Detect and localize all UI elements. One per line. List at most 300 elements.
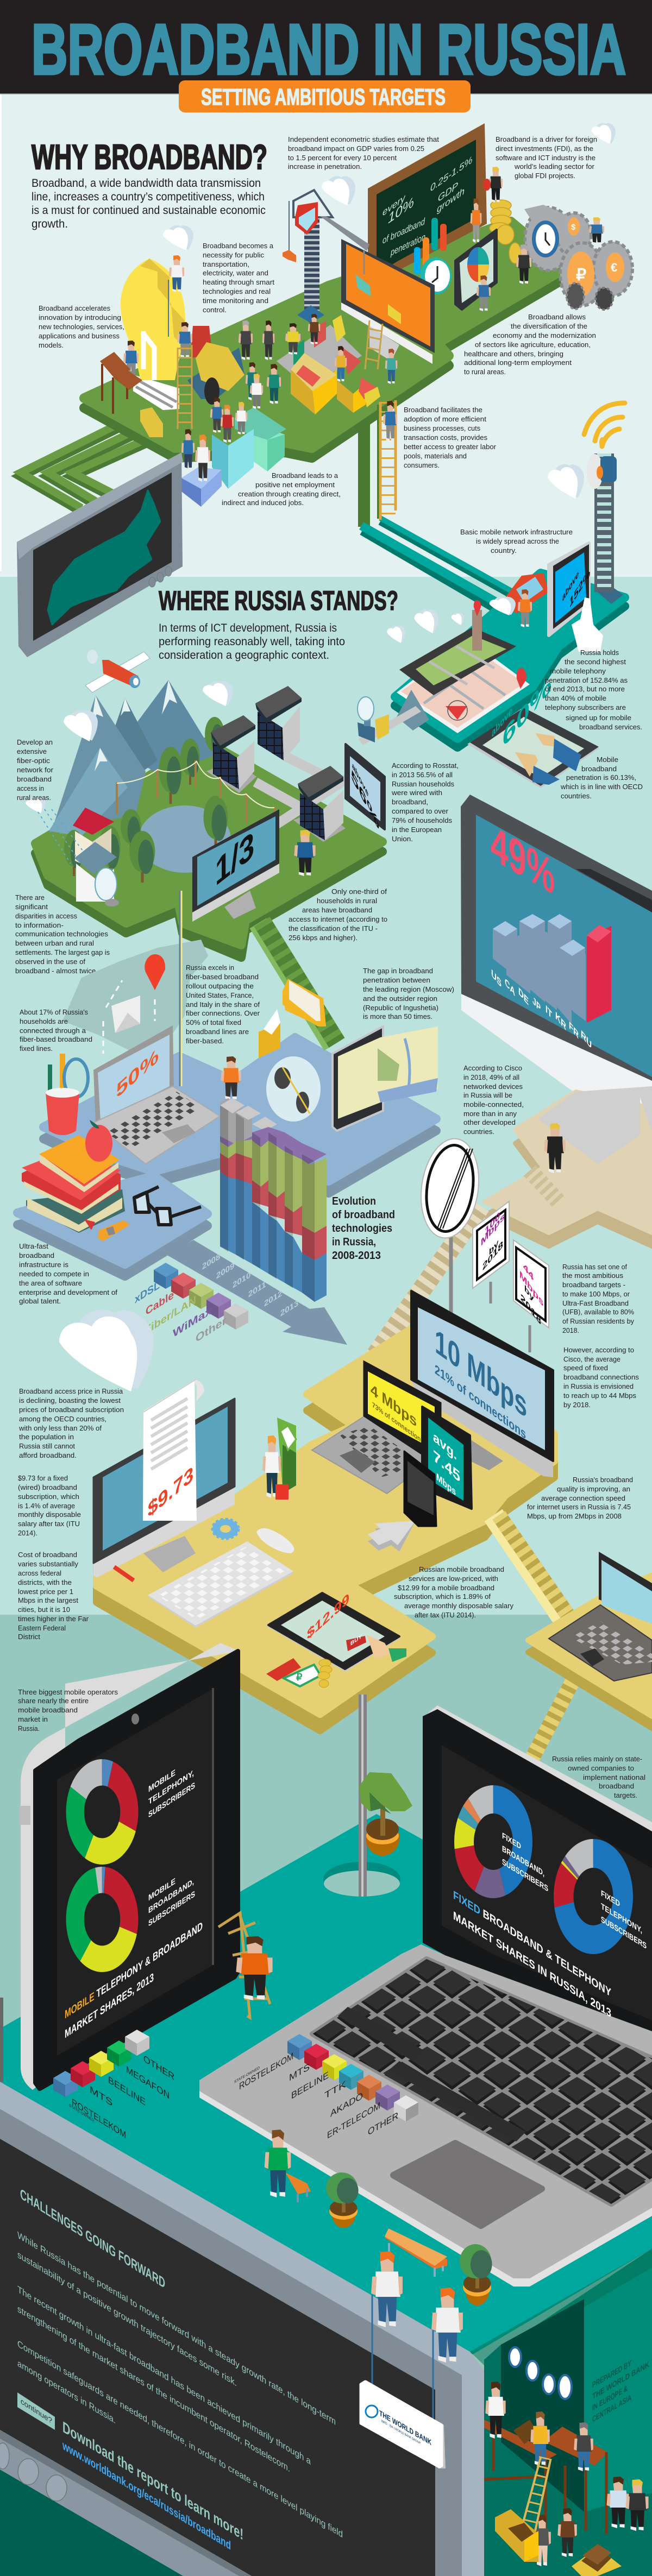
text block: FDI: global FDI projects.	[515, 172, 575, 180]
icon: world bank sign: IBRD · IDA | WORLD BANK GROUP	[381, 2419, 421, 2445]
text block: $9.73 fixed	[18, 1474, 81, 1537]
text block: $9.73 fixed: subscription, which	[18, 1492, 79, 1501]
text: prepared by: IN EUROPE &	[592, 2383, 628, 2413]
text block: mobile broadband penetration: broadband	[581, 765, 617, 773]
icon: monitor with receipt: $9.73	[148, 1462, 193, 1523]
text block: ultra-fast: the area of software	[19, 1279, 82, 1287]
chart: mobile telephony donut	[75, 1772, 129, 1851]
labels: mobile donuts: MOBILE	[148, 1768, 175, 1794]
text block: basic mobile network	[460, 528, 573, 555]
panel: right yellow platform	[528, 1575, 652, 1728]
icon: clock	[420, 257, 452, 294]
text block: broadband quality	[527, 1476, 633, 1520]
intro text: why broadband	[32, 177, 266, 230]
labels: mobile donuts: SUBSCRIBERS	[148, 1889, 195, 1929]
text block: FDI: software and ICT industry is the	[496, 154, 595, 162]
icon: tablet $12.99	[268, 1589, 406, 1672]
person: blond man village	[294, 830, 316, 876]
chart: fixed telephony donut	[563, 1853, 623, 1940]
text block: fiber rollout: Russia excels in	[186, 963, 234, 972]
chart: fixed broadband donut	[464, 1799, 523, 1884]
panel: lake and roads	[139, 706, 421, 873]
icon: blackboard: 0.25-1.5%	[430, 154, 473, 194]
icon: monitor 10 Mbps: 21% of connections	[435, 1362, 526, 1442]
icon: phone with 152 percent: 152%	[569, 565, 590, 611]
chart title: evolution	[332, 1195, 395, 1262]
text block: broadband quality: average connection speed	[541, 1494, 625, 1502]
icon: orange building	[255, 686, 302, 760]
text block: ultra-fast: enterprise and development of	[19, 1288, 117, 1296]
intro text: why broadband: is a must for continued and sustainable economic	[32, 204, 266, 217]
text block: public transportation: electricity, water and	[203, 269, 268, 277]
text block: disparities: There are	[15, 893, 45, 902]
text block: mobile broadband penetration: penetration is 60.13%,	[566, 773, 636, 782]
text block: low-priced mobile: average monthly disposable salary	[404, 1602, 513, 1610]
panel: teal mobile platform	[395, 573, 625, 747]
icon: right laptop	[549, 1552, 652, 1681]
labels: mobile donuts: MOBILE	[148, 1876, 175, 1903]
text block: ambitious targets: 2018.	[562, 1326, 579, 1334]
icon: clouds village	[64, 681, 233, 741]
chart: broadband technology timeline years: 2013	[280, 1298, 298, 1319]
icon: big monitor 49 percent: 49%	[491, 814, 555, 906]
icon: big monitor 49 percent: FR	[569, 1019, 579, 1041]
text block: rosstat: Union.	[392, 835, 413, 843]
icon: blackboard: 10%	[388, 194, 414, 226]
text block: efficient processes: better access to greater labor	[404, 443, 497, 451]
text block: ultra-fast: infrastructure is	[19, 1261, 68, 1269]
text block: cost varies: Mbps in the largest	[18, 1596, 78, 1604]
panel: black tablet left	[0, 1643, 239, 2090]
chart: broadband technology timeline years: 2010	[233, 1270, 250, 1290]
text block: fiber rollout: fiber-based.	[186, 1037, 224, 1045]
icon: cell tower	[587, 454, 623, 604]
icon: big monitor 49 percent: JP	[532, 994, 541, 1015]
icon: coins and gears	[490, 200, 632, 310]
icon: phone with 152 percent: above	[562, 568, 579, 604]
text block: broadband quality: for internet users in Russia is 7.45	[527, 1503, 631, 1511]
text block: ambitious targets: Ultra-Fast Broadband	[562, 1299, 629, 1307]
text block: regional gap: (Republic of Ingushetia)	[363, 1004, 438, 1012]
chart: evolution of broadband technologies columns	[220, 1098, 327, 1302]
subtitle pill: SETTING AMBITIOUS TARGETS	[201, 84, 446, 110]
chart: broadband technology timeline years	[202, 1251, 298, 1319]
text block: rosstat: compared to over	[392, 807, 449, 815]
text block: cost varies: District	[18, 1633, 40, 1641]
text block: ultra-fast: broadband	[19, 1251, 54, 1259]
icon: houses	[73, 808, 117, 902]
text block: regional gap	[363, 967, 454, 1021]
icon: blackboard: every	[383, 192, 406, 218]
text block: cisco networked devices: networked devices	[463, 1082, 523, 1091]
text block: price declining	[18, 1387, 124, 1459]
icon: pensioners	[371, 2251, 463, 2363]
icon: blackboard: GDP	[438, 180, 458, 204]
text: challenges paragraphs: strengthening of the market shares of the incumbent operator, Rostelecom.	[17, 2303, 290, 2474]
icon: timeline arrow	[166, 1240, 347, 1345]
icon: tablet with russia map	[17, 452, 183, 657]
pipes: green to teal connector	[361, 405, 516, 611]
text block: mobile telephony penetration	[545, 648, 642, 731]
text block: ultra-fast	[19, 1242, 117, 1305]
icon: tablet 56 percent: 56%	[351, 765, 379, 834]
text block: price declining: the population in	[19, 1433, 74, 1441]
icon: big monitor 49 percent: CA	[505, 975, 515, 998]
text block: disparities: between urban and rural	[15, 939, 94, 947]
text block: state-owned companies	[552, 1755, 645, 1799]
text block: operators share: share nearly the entire	[18, 1697, 89, 1705]
text block: mobile telephony penetration: telephony subscribers are	[545, 703, 626, 711]
text block: diversification: of sectors like agriculture, education,	[475, 341, 591, 349]
chart: broadband technology timeline years: 2011	[248, 1280, 266, 1300]
text block: price declining: afford broadband.	[19, 1451, 77, 1459]
text block: mobile telephony penetration: Russia holds	[580, 648, 619, 657]
text: prepared by: PREPARED BY	[592, 2358, 631, 2390]
text block: cisco speed: broadband connections	[563, 1373, 640, 1381]
labels: fixed donuts: TELEPHONY,	[601, 1901, 642, 1935]
text block: cost varies: cities, but it is 10	[18, 1605, 70, 1614]
icon: desks and team	[484, 2382, 649, 2566]
icon: cloud with gears	[266, 1056, 321, 1122]
text block: ultra-fast: global talent.	[19, 1297, 61, 1305]
text block: FDI: world's leading sector for	[514, 162, 595, 171]
icon: floor hole with pole	[323, 1695, 400, 1897]
icon: tablet with 60 percent: 60%	[503, 667, 551, 754]
icon: red car	[503, 573, 549, 627]
text block: mobile broadband penetration	[560, 755, 643, 800]
text block: price declining: is declining, boasting the lowest	[19, 1396, 121, 1404]
chart: broadband technology timeline years: 2008	[202, 1251, 220, 1272]
labels: mobile donuts: SUBSCRIBERS	[148, 1780, 195, 1820]
legend: mobile market operators: OTHER	[143, 2052, 174, 2082]
icon: coins and gears: $	[571, 223, 576, 232]
panel: challenges tablet frame	[0, 2082, 484, 2576]
icon: palm tree	[359, 1772, 412, 1856]
icon: clouds mobile platform	[387, 596, 516, 643]
icon: beige stairs	[374, 1206, 481, 1358]
labels: fixed donuts	[502, 1831, 647, 1951]
labels: fixed donuts: FIXED	[601, 1888, 620, 1909]
text block: disparities	[15, 893, 110, 975]
text block: cisco networked devices: mobile-connected,	[463, 1100, 524, 1109]
text block: ambitious targets: the most ambitious	[562, 1271, 624, 1280]
icon: tablet avg speed: avg.	[433, 1428, 457, 1464]
text block: cisco speed: speed of fixed	[563, 1364, 608, 1372]
icon: tablet avg speed	[422, 1407, 472, 1509]
callout: continue	[17, 2392, 55, 2430]
icon: wall clocks	[509, 2347, 572, 2399]
text block: low-priced mobile: after tax (ITU 2014).	[415, 1611, 476, 1619]
icon: sign 44 Mbps: by	[524, 1283, 534, 1305]
icon: potted plant two	[460, 2244, 492, 2306]
intro text: why broadband: Broadband, a wide bandwidth data transmission	[32, 177, 261, 190]
text block: public transportation	[203, 242, 274, 314]
text block: rosstat: broadband,	[392, 798, 428, 806]
icon: big monitor 49 percent: US	[491, 967, 501, 990]
icon: construction crane	[283, 190, 369, 323]
text: prepared by: CENTRAL ASIA	[592, 2392, 631, 2424]
text block: cisco speed: However, according to	[563, 1346, 634, 1354]
person: orange shirt person	[221, 1056, 241, 1100]
text block: mobile telephony penetration: penetration of 152.84% as	[545, 676, 628, 684]
icon: sign 100 Mbps: Mbps	[481, 1210, 505, 1249]
icon: tablet avg speed: 7.45	[433, 1446, 460, 1486]
text block: fiber-optic network: rural areas.	[17, 793, 51, 802]
icon: satellite	[85, 650, 150, 692]
icon: books and apple	[22, 1120, 125, 1233]
intro text: where russia stands: performing reasonably well, taking into	[159, 635, 345, 648]
text block: $9.73 fixed: is 1.4% of average	[18, 1502, 75, 1510]
text block: innovation: new technologies, services,	[39, 323, 124, 331]
icon: light bulb	[121, 259, 185, 437]
text block: employment: Broadband leads to a	[272, 471, 338, 480]
title: mobile market shares: MOBILE TELEPHONY & BROADBAND	[65, 1919, 203, 2021]
text block: econometric studies: broadband impact on GDP varies from 0.25	[288, 144, 424, 153]
text block: $9.73 fixed: $9.73 for a fixed	[18, 1474, 68, 1482]
icon: sign 44 Mbps: 44	[523, 1259, 534, 1283]
text block: mobile telephony penetration: of end 2013, but no more	[545, 685, 625, 693]
text block: mobile broadband penetration: which is in line with OECD	[560, 783, 643, 791]
icon: paper plane	[103, 980, 155, 1054]
text block: efficient processes: consumers.	[404, 461, 440, 469]
legend: mobile market operators: BEELINE	[108, 2074, 146, 2108]
icon: world map ghost	[62, 940, 208, 1051]
text block: price declining: with only less than 20% of	[18, 1424, 102, 1432]
text block: diversification: to rural areas.	[464, 368, 506, 376]
chart title: evolution: in Russia,	[332, 1236, 376, 1248]
heading: where russia stands: WHERE RUSSIA STANDS?	[159, 585, 398, 616]
text block: rosstat: in 2013 56.5% of all	[392, 771, 453, 779]
text block: FDI: Broadband is a driver for foreign	[496, 135, 597, 143]
text block: cisco networked devices	[463, 1064, 524, 1136]
icon: monitor	[341, 239, 435, 364]
text block: innovation: innovation by introducing	[39, 313, 121, 322]
panel: beige platform	[485, 1092, 652, 1246]
text block: ambitious targets	[562, 1263, 634, 1334]
legend: technologies cubes: xDSL	[135, 1278, 160, 1306]
text: challenges paragraphs	[17, 2229, 343, 2540]
icon: usb stick	[98, 1220, 130, 1241]
text block: fiber rollout: United States, France,	[186, 991, 254, 999]
icon: utility poles	[117, 760, 274, 836]
text block: operators share: Russia.	[18, 1724, 40, 1733]
icon: monitor 10 Mbps: 10 Mbps	[435, 1321, 527, 1426]
text block: employment: indirect and induced jobs.	[222, 499, 304, 507]
text block: operators share	[18, 1688, 118, 1733]
legend: technologies cubes: Cable	[146, 1288, 174, 1318]
icon: monitor one third	[192, 809, 279, 922]
text block: mobile telephony penetration: mobile telephony	[550, 667, 606, 675]
icon: laptop 4 Mbps: 73% of connections	[372, 1401, 424, 1446]
text block: diversification: the diversification of the	[511, 322, 587, 330]
text block: diversification: economy and the modernization	[493, 331, 596, 339]
panel: green pipes	[21, 415, 163, 512]
text block: 17 percent households: About 17% of Russia's	[20, 1008, 88, 1016]
text block: efficient processes: pools, materials and	[404, 452, 467, 460]
labels: fixed donuts: SUBSCRIBERS	[502, 1857, 548, 1894]
text block: ambitious targets: Russia has set one of	[562, 1263, 627, 1271]
chart title: evolution: Evolution	[332, 1195, 376, 1207]
text block: 17 percent households	[20, 1008, 92, 1053]
text block: fiber rollout: broadband lines are	[186, 1028, 249, 1036]
icon: trees	[64, 717, 228, 883]
text block: innovation: applications and business	[39, 332, 120, 340]
icon: world bank sign	[361, 2295, 446, 2468]
legend: mobile market operators: STATE-OWNED	[69, 2103, 94, 2123]
icon: mouse	[256, 1528, 294, 1553]
text block: econometric studies: increase in penetration.	[288, 162, 362, 171]
text block: efficient processes: transaction costs, provides	[404, 433, 487, 442]
text block: state-owned companies: broadband	[599, 1782, 634, 1790]
text: challenges paragraphs: sustainability of a positive growth trajectory faces some risk.	[17, 2249, 237, 2389]
text: prepared by	[592, 2358, 649, 2424]
icon: stand and seated person	[530, 1086, 652, 1203]
text block: cost varies: Cost of broadband	[18, 1551, 77, 1559]
text block: fiber rollout: and Italy in the share of	[186, 1000, 260, 1009]
text block: regional gap: and the outsider region	[363, 994, 437, 1003]
icon: dish village	[95, 868, 119, 906]
text block: cisco speed: Cisco, the average	[563, 1355, 620, 1363]
icon: coins and gears: ₽	[576, 266, 586, 284]
text block: efficient processes: Broadband facilitates the	[404, 406, 482, 414]
text block: ambitious targets: of Russian residents by	[562, 1317, 634, 1325]
text block: rosstat: were wired with	[391, 789, 442, 797]
text block: disparities: to information-	[15, 921, 64, 929]
text block: low-priced mobile: services are low-priced, with	[409, 1574, 498, 1583]
text block: state-owned companies: implement national	[583, 1773, 645, 1781]
chart title: evolution: of broadband	[332, 1209, 395, 1221]
text block: ultra-fast: needed to compete in	[19, 1270, 89, 1278]
text block: state-owned companies: owned companies to	[568, 1764, 634, 1772]
text block: employment	[222, 471, 341, 507]
labels: mobile donuts	[148, 1768, 195, 1929]
text block: price declining: Russia still cannot	[19, 1442, 75, 1450]
icon: world bank sign: THE WORLD BANK	[379, 2409, 431, 2447]
icon: yellow building	[293, 766, 346, 842]
icon: red map pin	[145, 954, 165, 990]
icon: blackboard	[368, 123, 487, 291]
text block: mobile telephony penetration: the second highest	[565, 658, 626, 666]
legend: technologies cubes: WiMax	[173, 1303, 212, 1340]
text block: low-priced mobile: subscription, which is 1.89% of	[394, 1592, 491, 1601]
icon: wifi arcs	[584, 403, 625, 448]
legend: fixed market operators: TTK	[324, 2078, 347, 2101]
icon: card money and coins: ₽	[296, 1672, 303, 1683]
text block: cisco networked devices: countries.	[463, 1128, 494, 1136]
icon: dish truck	[358, 697, 389, 742]
legend: fixed market operators	[234, 2034, 418, 2141]
text block: efficient processes: adoption of more efficient	[404, 415, 486, 423]
text block: state-owned companies: targets.	[614, 1791, 637, 1799]
text block: cost varies: across federal	[18, 1569, 61, 1577]
icon: big cloud	[59, 1309, 154, 1391]
text block: public transportation: technologies and real	[203, 287, 271, 295]
legend: fixed market operators: MTS	[289, 2061, 310, 2083]
text block: cost varies: Eastern Federal	[18, 1624, 66, 1632]
icon: monitor with receipt	[93, 1380, 235, 1578]
icon: big monitor 49 percent	[461, 795, 652, 1138]
pole: vertical cable	[180, 891, 181, 1086]
text block: disparities: significant	[15, 903, 48, 911]
text block: ambitious targets: broadband targets -	[562, 1281, 625, 1289]
text block: ultra-fast: Ultra-fast	[19, 1242, 48, 1250]
text block: public transportation: necessity for public	[203, 251, 264, 259]
icon: tablet 56 percent: above	[352, 760, 368, 799]
text block: basic mobile network: country.	[491, 546, 517, 555]
text block: innovation	[39, 304, 124, 349]
icon: green stairs	[258, 922, 337, 1045]
text block: efficient processes: business processes, cuts	[404, 424, 480, 432]
icon: laptop 4 Mbps: 4 Mbps	[371, 1380, 417, 1431]
text block: broadband quality: quality is improving, an	[557, 1485, 630, 1493]
text block: $9.73 fixed: monthly disposable	[18, 1510, 81, 1519]
text: challenges paragraphs: The recent growth in ultra-fast broadband has been achieved primarily through a	[17, 2283, 311, 2467]
icon: blackboard: growth	[437, 186, 465, 215]
icon: rain cloud	[26, 797, 84, 864]
chart title: evolution: 2008-2013	[332, 1250, 381, 1262]
text block: $9.73 fixed: salary after tax (ITU	[18, 1520, 80, 1528]
icon: folder	[283, 979, 326, 1026]
panel: black tablet right	[423, 1705, 652, 2031]
chart title: evolution: technologies	[332, 1223, 392, 1235]
icon: mountains	[49, 680, 215, 836]
icon: blackboard: penetration	[390, 231, 425, 258]
text block: FDI: direct investments (FDI), as the	[496, 144, 593, 153]
text block: fiber-optic network: network for	[17, 766, 54, 774]
text block: efficient processes	[404, 406, 497, 469]
text block: innovation: models.	[39, 341, 64, 349]
text block: disparities: broadband - almost twice.	[15, 967, 98, 975]
text block: rosstat: in the European	[392, 826, 442, 834]
chart: broadband technology timeline years: 2009	[216, 1261, 234, 1281]
panel: fold map tablet	[333, 1026, 438, 1131]
text block: one third rural: access to internet (according to	[289, 915, 387, 923]
icon: clouds top	[163, 123, 616, 499]
text block: innovation: Broadband accelerates	[39, 304, 110, 312]
text block: state-owned companies: Russia relies mainly on state-	[552, 1755, 642, 1763]
text block: econometric studies: to 1.5 percent for every 10 percent	[288, 154, 397, 162]
text block: broadband quality: Russia's broadband	[573, 1476, 633, 1484]
text block: public transportation: Broadband becomes a	[203, 242, 274, 250]
text block: fiber rollout: rollout outpacing the	[186, 982, 254, 990]
text block: rosstat: 79% of households	[392, 816, 452, 824]
text block: price declining: Broadband access price in Russia	[19, 1387, 123, 1395]
text block: fiber-optic network: Develop an	[17, 738, 53, 746]
text block: diversification	[464, 313, 596, 376]
text block: cisco networked devices: in Russia will be	[463, 1091, 512, 1099]
panel: green platform	[84, 222, 566, 458]
text block: econometric studies: Independent econometric studies estimate that	[288, 135, 439, 143]
text block: rosstat: Russian households	[392, 780, 454, 788]
text block: employment: creation through creating direct,	[238, 490, 341, 498]
text block: operators share: Three biggest mobile operators	[18, 1688, 118, 1696]
text block: one third rural	[289, 887, 387, 942]
text block: ambitious targets: (UFB), available to 80%	[562, 1308, 634, 1316]
legend: fixed market operators: ROSTELEKOM	[239, 2050, 293, 2092]
icon: blue building	[206, 715, 256, 793]
panel: back room wall	[470, 2249, 652, 2576]
intro text: where russia stands: In terms of ICT development, Russia is	[159, 622, 337, 634]
icon: monitor one third: 1/3	[215, 823, 254, 895]
text block: cisco networked devices: in 2018, 49% of all	[463, 1073, 519, 1081]
person: kiosk shopper	[262, 1418, 296, 1500]
intro text: why broadband: line, increases a country’s competitiveness, which	[32, 191, 265, 203]
icon: big monitor 49 percent: IT	[546, 1003, 552, 1022]
text block: mobile broadband penetration: countries.	[561, 792, 592, 800]
icon: blackboard: of broadband	[383, 216, 425, 246]
icon: potted plant one	[326, 2172, 359, 2228]
icon: sign 44 Mbps: Mbps	[519, 1268, 543, 1309]
